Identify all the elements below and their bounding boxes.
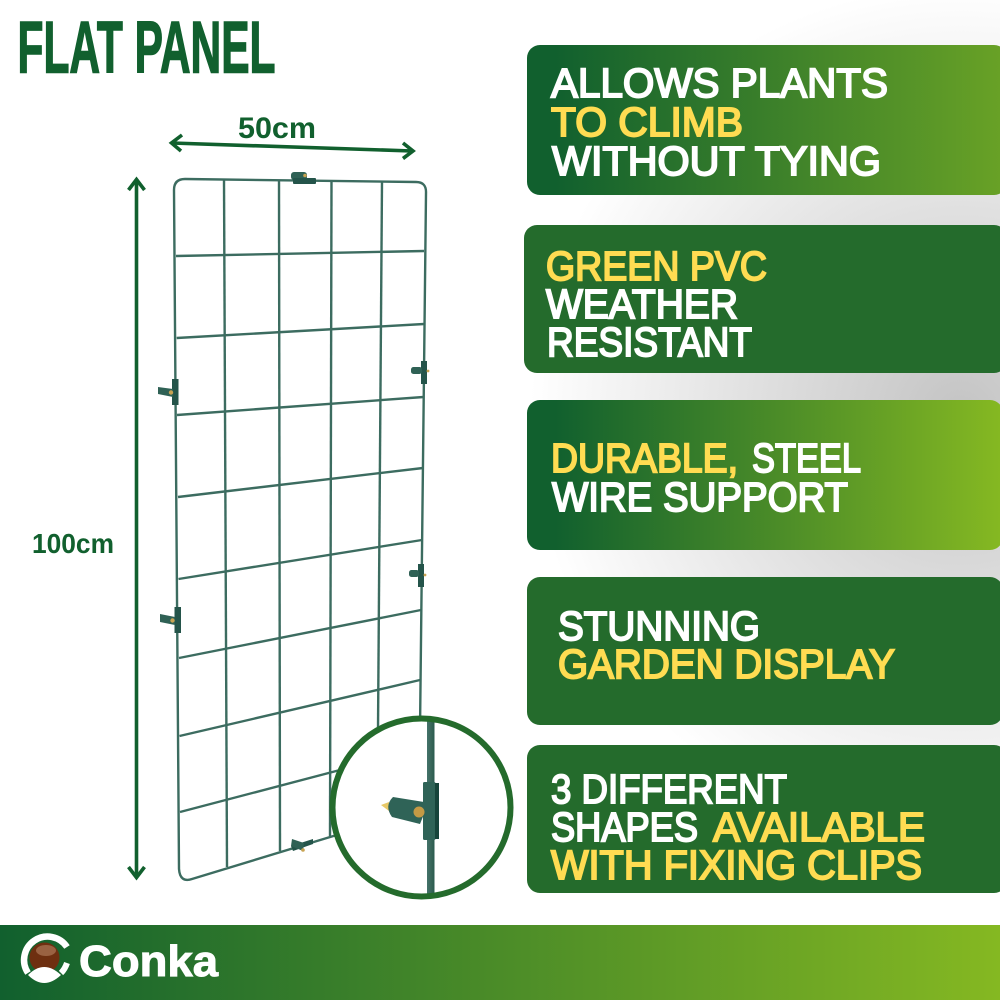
title: FLAT PANEL [18,8,276,88]
text: green pvc: GREEN PVC [546,243,767,289]
panel: green pvc [524,225,1000,373]
arrow: height [128,180,144,878]
text: available: AVAILABLE [713,804,925,850]
panel: 3 different shapes [527,745,1000,893]
text: without tying: WITHOUT TYING [552,138,881,184]
arrow: width [172,135,413,158]
text: garden display: GARDEN DISPLAY [558,641,895,687]
text: weather: WEATHER [546,281,738,327]
rod [427,720,434,895]
icon: conka logo [24,937,67,983]
footer band [0,925,1000,1000]
text: to climb: TO CLIMB [551,99,743,145]
width label: 50cm: 50cm [238,112,316,145]
text: 3 different: 3 DIFFERENT [551,766,787,812]
panel: durable [527,400,1000,550]
clip: upper left [158,379,178,405]
height label: 100cm: 100cm [32,528,114,559]
text: durable: DURABLE, [551,435,738,481]
detail circle: fixing clip close-up [332,718,510,896]
clip: lower left [160,607,181,633]
text: stunning: STUNNING [558,603,760,649]
wire trellis panel [158,172,429,880]
clip: upper right [411,361,429,384]
logo wordmark: Conka [79,937,219,986]
text: resistant: RESISTANT [547,319,752,365]
clip peg [381,797,424,824]
text: shapes: SHAPES [551,804,698,850]
text: allows plants: ALLOWS PLANTS [551,60,888,106]
text: wire support: WIRE SUPPORT [552,474,848,520]
panel: stunning garden display [527,577,1000,725]
clip body [423,782,439,840]
clip: top [291,172,316,184]
text: steel: STEEL [752,435,861,481]
panel: allows plants to climb [527,45,1000,195]
clip: bottom [291,839,313,852]
text: with fixing clips: WITH FIXING CLIPS [551,842,922,888]
clip: middle right [409,564,426,587]
